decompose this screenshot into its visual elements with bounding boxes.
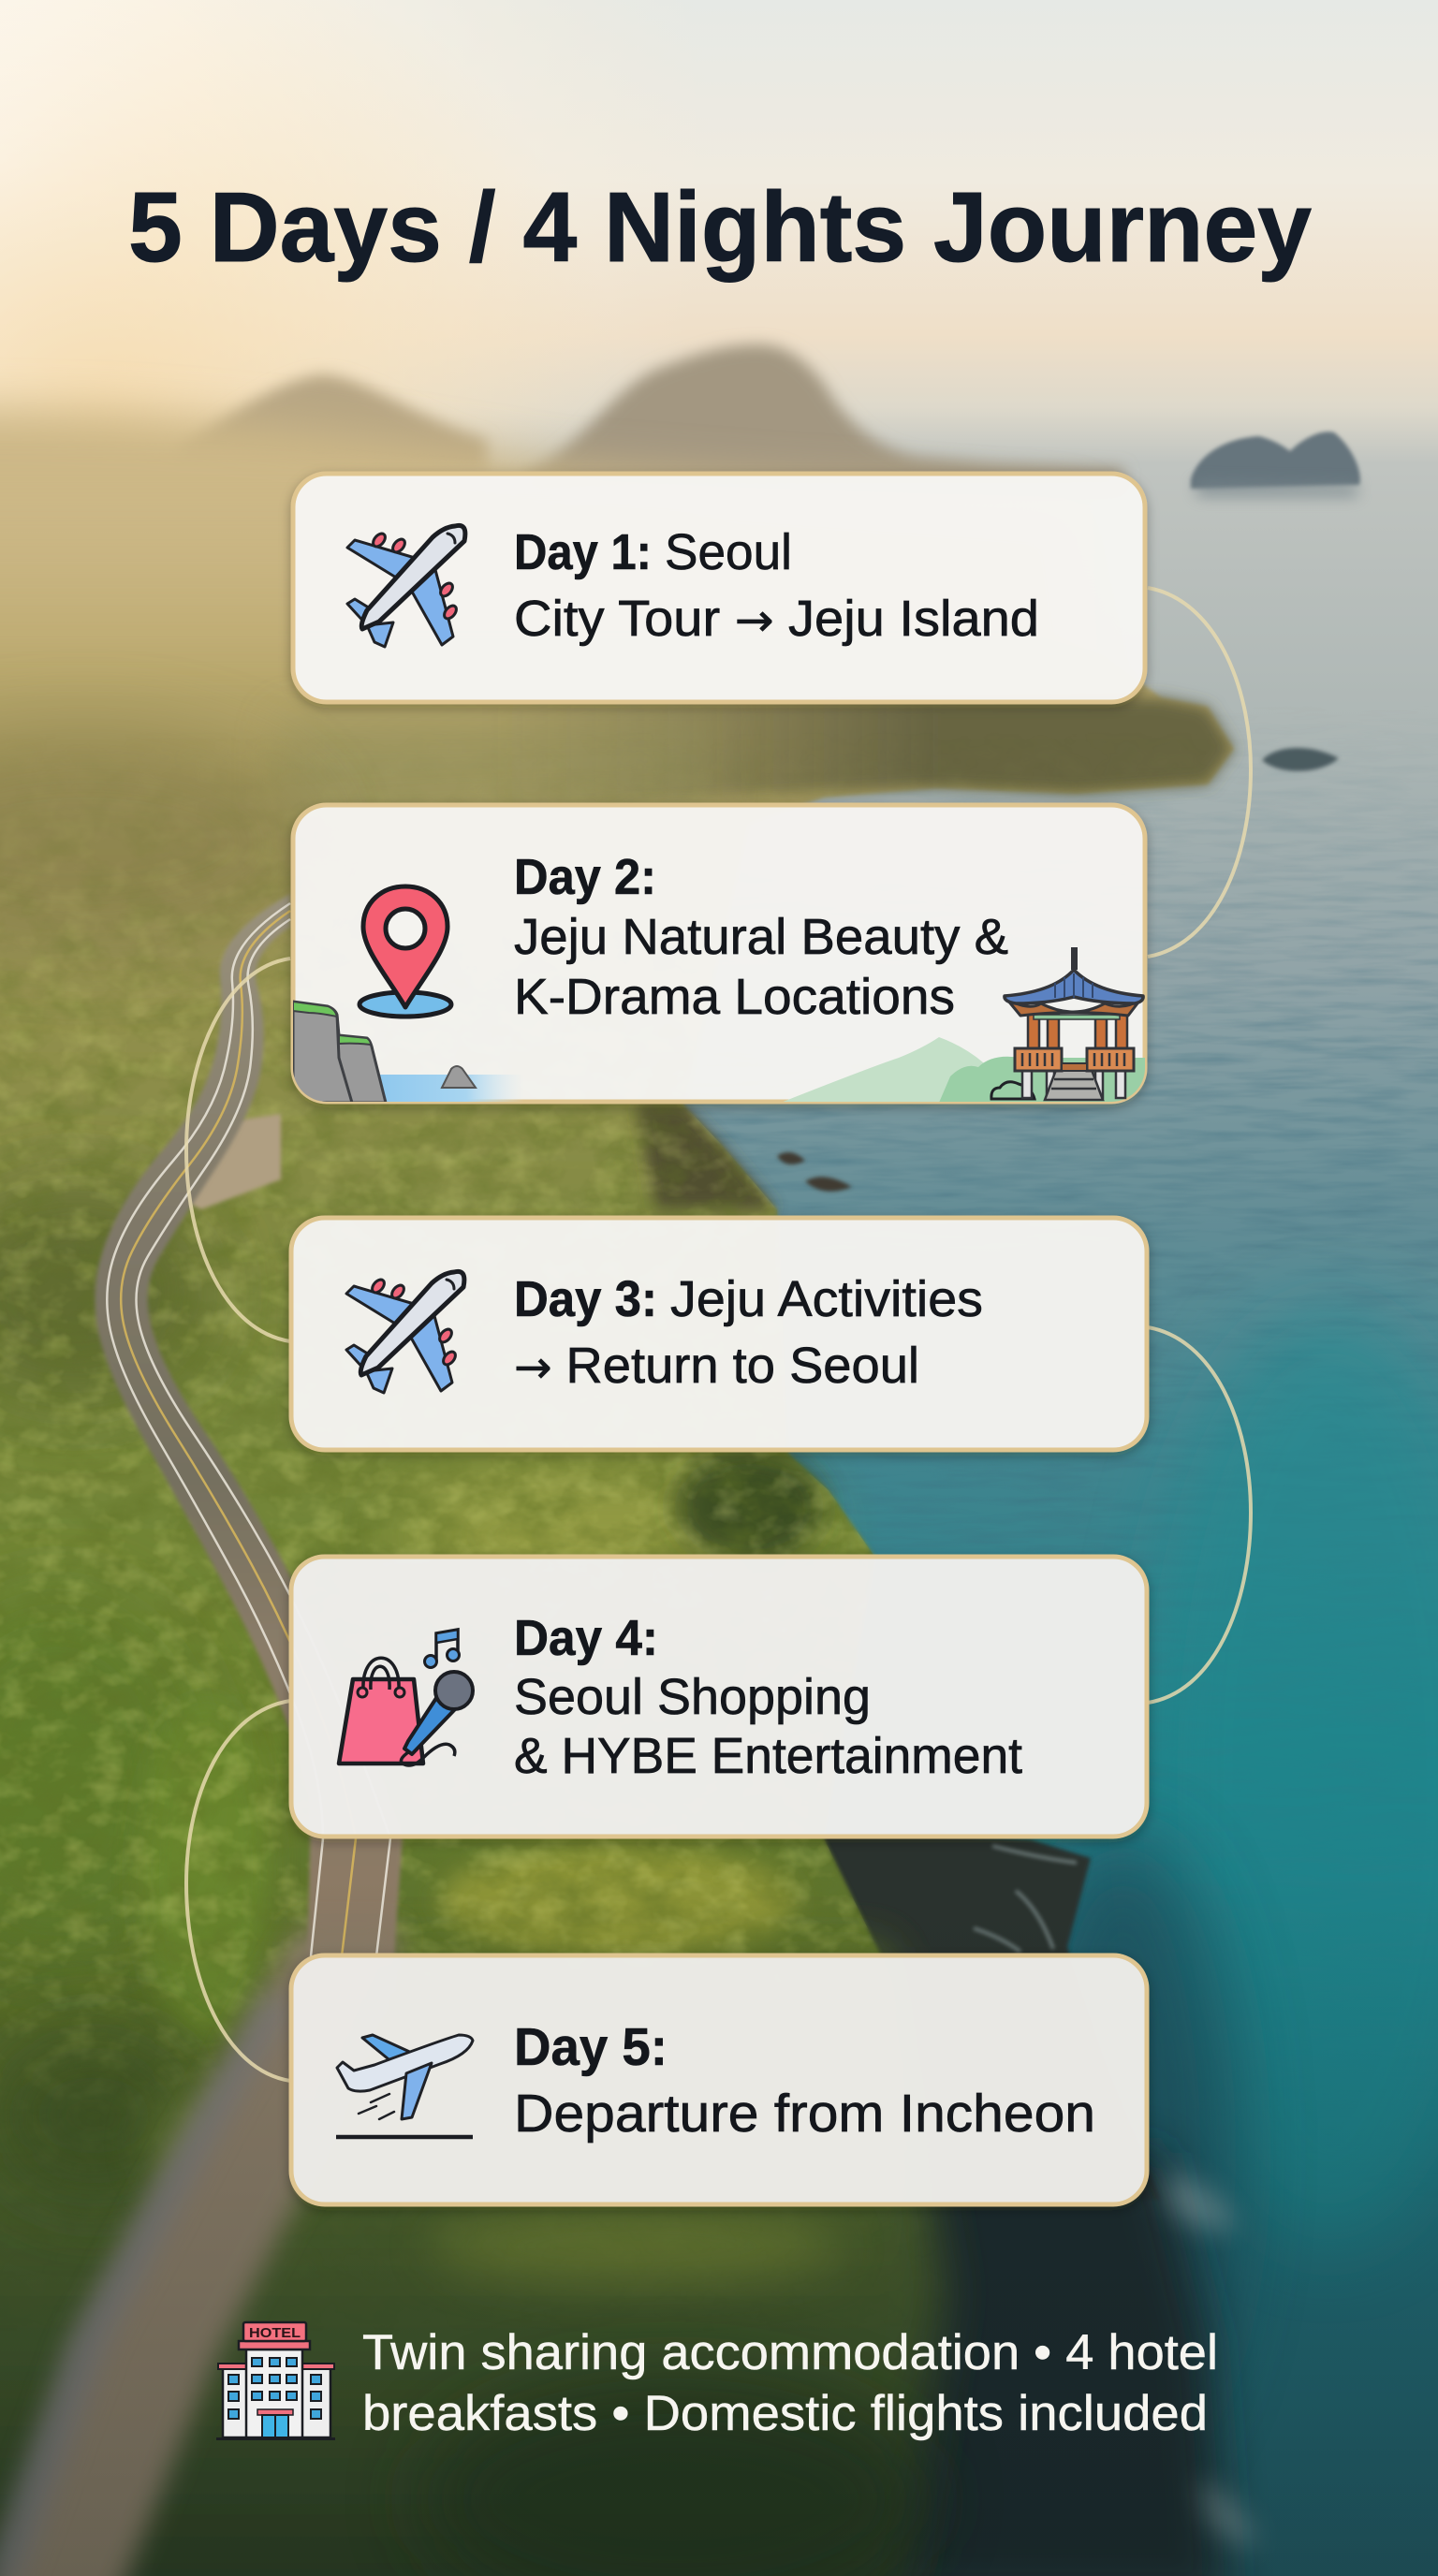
- card background: [293, 805, 1145, 1102]
- panel: day 4: [291, 1557, 1147, 1837]
- connector: day 1 to day 2: [1148, 588, 1251, 957]
- card background: [293, 474, 1145, 702]
- day 2 label: Day 2:: [514, 849, 656, 905]
- card background: [291, 1218, 1147, 1450]
- connector: day 3 to day 4: [1148, 1327, 1251, 1703]
- day 3 activity: Jeju Activities: [670, 1271, 983, 1327]
- day 2 description line 2: K-Drama Locations: [514, 969, 955, 1025]
- panel: day 3: [291, 1218, 1147, 1450]
- card background: [291, 1557, 1147, 1837]
- day 2 description line 1: Jeju Natural Beauty &: [514, 909, 1008, 965]
- panel: day 1: [293, 474, 1145, 702]
- card background: [291, 1955, 1147, 2204]
- day 4 description line 2: & HYBE Entertainment: [514, 1728, 1022, 1784]
- day 4 label: Day 4:: [514, 1610, 658, 1666]
- day 4 description line 1: Seoul Shopping: [514, 1669, 871, 1725]
- hotel sign text: HOTEL: [249, 2325, 301, 2341]
- icon: hotel: [216, 2322, 335, 2440]
- icon: korean pavilion: [1005, 949, 1143, 1100]
- icon: shopping bag, microphone and music note: [339, 1630, 473, 1765]
- icon: departing airplane: [336, 2035, 473, 2137]
- icon: airplane: [346, 1271, 464, 1393]
- day 5 description: Departure from Incheon: [514, 2084, 1095, 2144]
- footer text line 2: breakfasts • Domestic flights included: [362, 2386, 1208, 2441]
- day 5 label: Day 5:: [514, 2017, 668, 2077]
- day 1 description: City Tour → Jeju Island: [514, 591, 1039, 647]
- connector: day 2 to day 3: [186, 959, 290, 1341]
- footer text line 1: Twin sharing accommodation • 4 hotel: [362, 2325, 1218, 2380]
- day 1 label: Day 1:: [514, 524, 652, 580]
- icon: map pin: [360, 886, 451, 1017]
- title: 5 Days / 4 Nights Journey: [128, 172, 1312, 283]
- panel: day 2: [293, 805, 1147, 1103]
- panel: day 5: [291, 1955, 1147, 2204]
- icon: airplane: [347, 525, 465, 647]
- footer: accommodation note: [216, 2322, 1218, 2441]
- day 1 location: Seoul: [665, 524, 792, 580]
- scenery: cliffs and sea: [293, 1002, 1147, 1103]
- day 3 label: Day 3:: [514, 1271, 657, 1327]
- connector: day 4 to day 5: [186, 1701, 290, 2081]
- day 3 description: → Return to Seoul: [514, 1338, 919, 1394]
